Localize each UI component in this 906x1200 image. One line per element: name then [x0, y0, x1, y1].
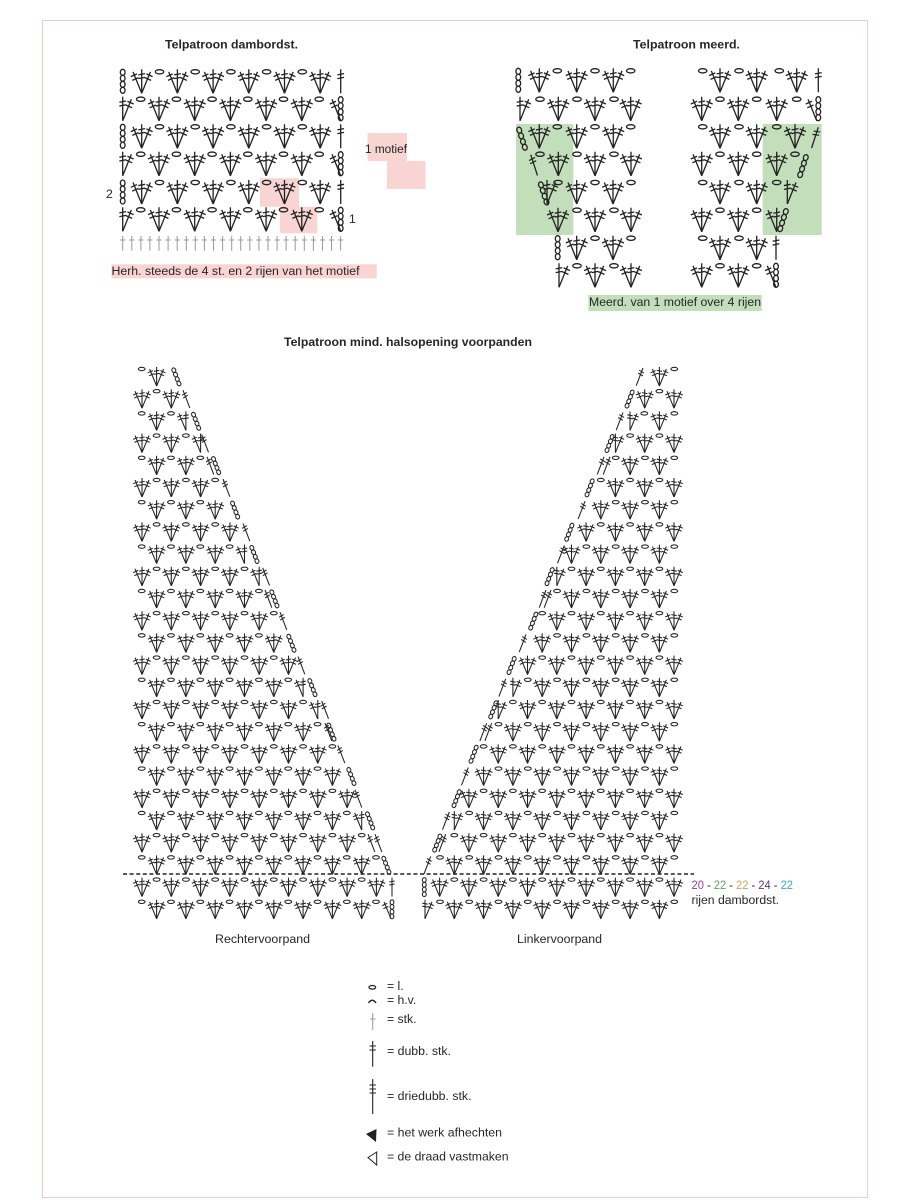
legend: de draad vastmaken: = de draad vastmaken [387, 1150, 508, 1164]
green highlight right [763, 124, 822, 235]
label: rijen per maat: 20 - 22 - 22 - 24 - 22 [692, 878, 793, 892]
label: rechtervoorpand: Rechtervoorpand [215, 932, 310, 946]
title: halsopening: Telpatroon mind. halsopening voorpanden [284, 336, 532, 349]
caption: meerderen: Meerd. van 1 motief over 4 rijen [589, 295, 761, 309]
row label 1: 1 [349, 212, 356, 226]
legend: het werk afhechten: = het werk afhechten [387, 1126, 502, 1140]
legend: driedubb. stk.: = driedubb. stk. [387, 1089, 472, 1103]
right side rows [691, 68, 822, 287]
legend: stk. [370, 1012, 416, 1030]
legend: h.v.: = h.v. [387, 993, 416, 1007]
symbol legend [366, 979, 508, 1165]
base row of grey stitches [120, 236, 343, 251]
dashed divider line [123, 873, 694, 875]
motif highlight in chart [260, 178, 317, 233]
chart: telpatroon meerd [516, 68, 822, 287]
legend: stk.: = stk. [387, 1012, 416, 1026]
chart: telpatroon dambordst [106, 69, 356, 251]
crochet rows [119, 69, 344, 231]
row label 2: 2 [106, 187, 113, 201]
label: rijen per maat: rijen dambordst. [692, 893, 779, 907]
title: telpatroon meerd: Telpatroon meerd. [633, 38, 740, 52]
legend: dubb. stk. [370, 1041, 451, 1067]
title: telpatroon dambordst: Telpatroon dambordst. [165, 38, 298, 52]
legend: l. [369, 979, 404, 993]
label: linkervoorpand: Linkervoorpand [517, 932, 602, 946]
label: rijen per maat [692, 878, 793, 907]
legend: driedubb. stk. [370, 1079, 472, 1114]
legend: 1 motief [365, 133, 426, 189]
legend: l.: = l. [387, 979, 404, 993]
caption: herhalen: Herh. steeds de 4 st. en 2 rijen van het motief [112, 264, 360, 278]
legend: dubb. stk.: = dubb. stk. [387, 1044, 451, 1058]
legend: 1 motief: 1 motief [365, 142, 408, 156]
green highlight left [516, 124, 573, 235]
chart: rechtervoorpand [133, 367, 395, 919]
left side rows [516, 68, 642, 287]
chart: linkervoorpand [421, 367, 683, 919]
legend: h.v. [368, 993, 416, 1007]
